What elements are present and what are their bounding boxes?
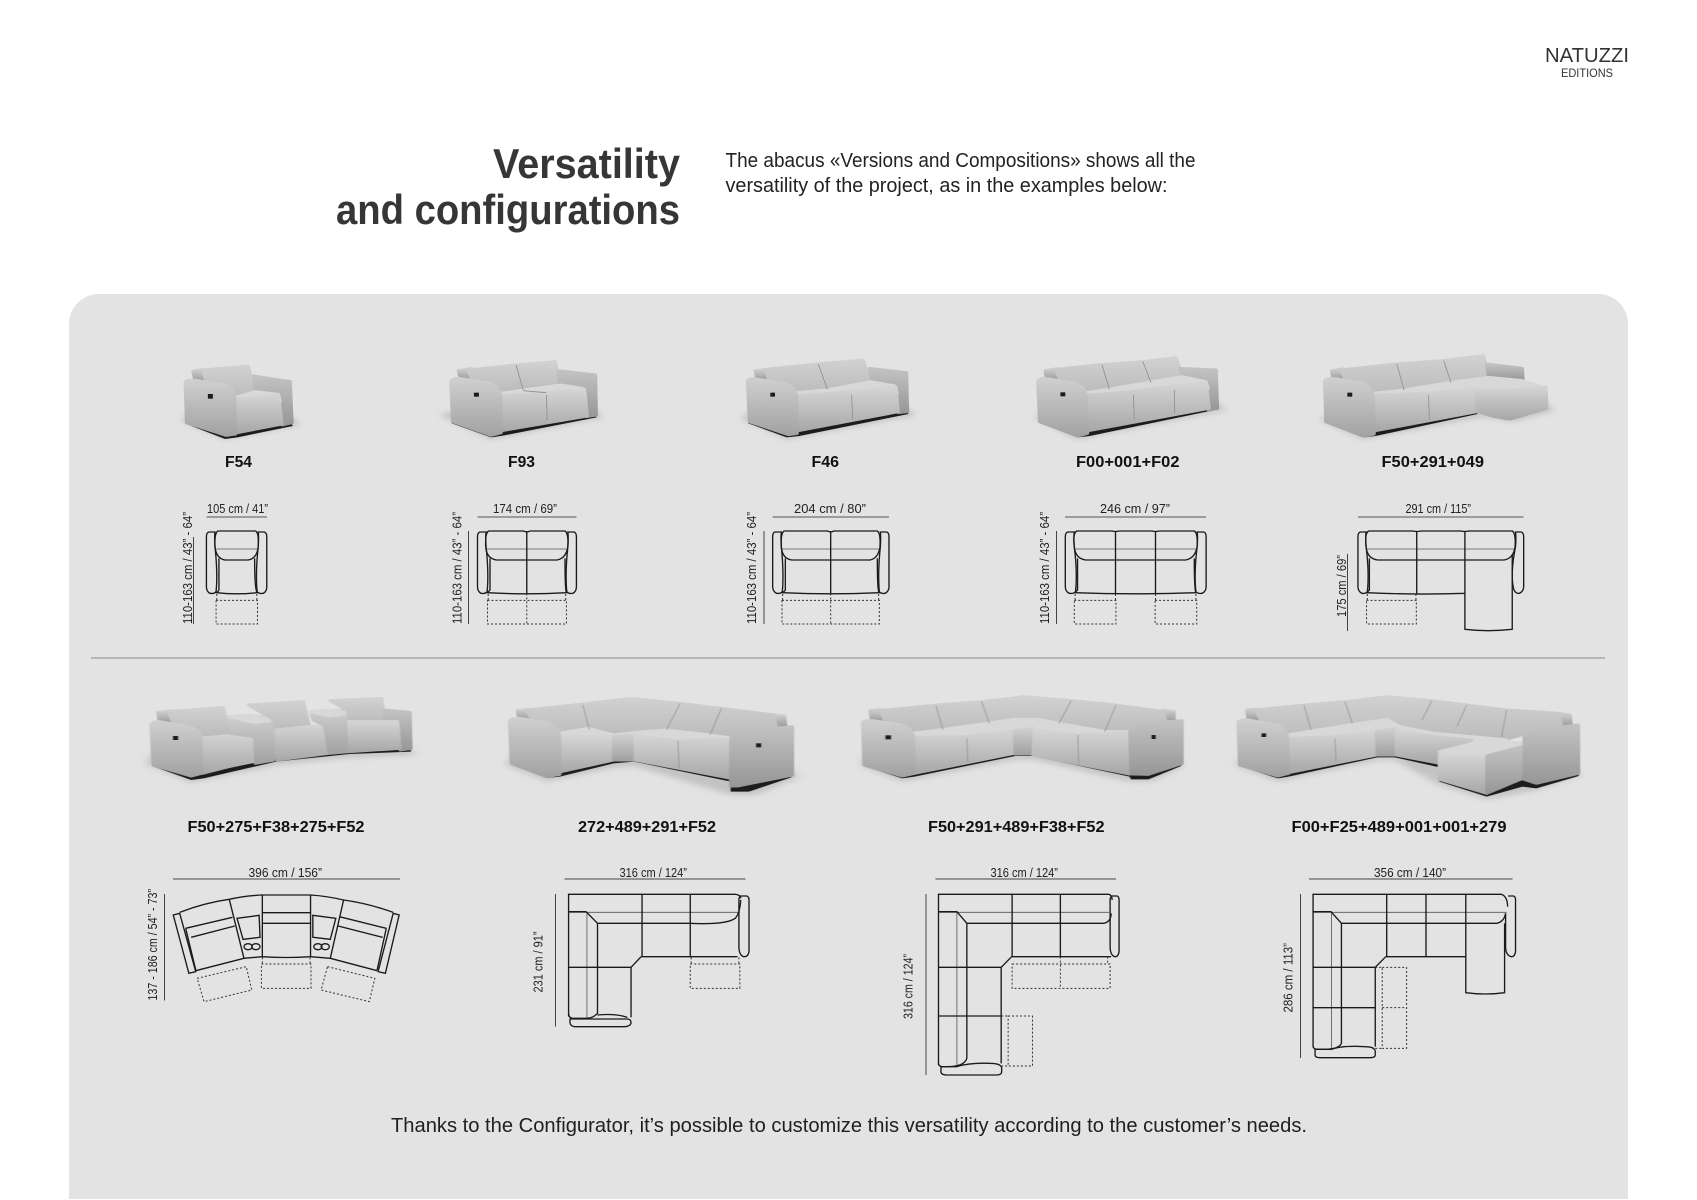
label: F50+275+F38+275+F52: F50+275+F38+275+F52 xyxy=(188,819,365,836)
floor plan: F50+275+F38+275+F52 xyxy=(173,895,399,1002)
logo: Natuzzi Editions: EDITIONS xyxy=(1561,68,1613,80)
sofa photo: F54 xyxy=(180,366,300,439)
width dimension: F54: 105 cm / 41” xyxy=(207,501,268,516)
label: F93: F93 xyxy=(508,454,535,471)
floor plan: F50+291+049 xyxy=(1358,531,1524,631)
module: 272+489+291+F52 xyxy=(506,698,800,1027)
width dimension: 272+489+291+F52: 316 cm / 124” xyxy=(620,865,687,880)
depth dimension: F00+001+F02 xyxy=(1037,512,1057,624)
depth dimension: 272+489+291+F52 xyxy=(530,894,556,1026)
module: F93 xyxy=(439,362,604,624)
floor plan: F93 xyxy=(477,531,576,624)
width dimension: F46 xyxy=(773,501,889,518)
depth dimension: F46 xyxy=(744,512,764,624)
depth dimension: 272+489+291+F52: 231 cm / 91” xyxy=(530,932,546,992)
intro text xyxy=(726,150,1196,197)
module: F54 xyxy=(180,366,300,624)
depth dimension: F00+001+F02: 110-163 cm / 43” - 64” xyxy=(1037,512,1052,624)
floor plan: F50+291+489+F38+F52 xyxy=(938,894,1119,1075)
module: F50+275+F38+275+F52 xyxy=(145,698,416,1002)
module: F00+F25+489+001+001+279 xyxy=(1235,697,1581,1058)
sofa photo: F46 xyxy=(740,360,917,439)
module: F50+291+049 xyxy=(1320,356,1555,631)
sofa photo: F00+F25+489+001+001+279 xyxy=(1235,697,1581,799)
depth dimension: F93: 110-163 cm / 43” - 64” xyxy=(450,512,464,624)
intro text: The abacus «Versions and Compositions» shows all the xyxy=(726,150,1196,172)
floor plan: F00+F25+489+001+001+279 xyxy=(1313,894,1516,1058)
label: F46: F46 xyxy=(812,454,839,471)
sofa photo: F50+275+F38+275+F52 xyxy=(145,698,416,783)
title: and configurations xyxy=(336,186,680,233)
depth dimension: F93 xyxy=(450,512,469,624)
closing text: Thanks to the Configurator, it’s possible to customize this versatility according to the customer’s needs. xyxy=(391,1114,1307,1137)
width dimension: F50+275+F38+275+F52: 396 cm / 156” xyxy=(248,865,322,880)
sofa photo: F50+291+049 xyxy=(1320,356,1555,439)
label: F50+291+049: F50+291+049 xyxy=(1382,454,1484,471)
width dimension: F93: 174 cm / 69” xyxy=(493,501,557,516)
sofa photo: 272+489+291+F52 xyxy=(506,698,800,795)
width dimension: F50+291+489+F38+F52: 316 cm / 124” xyxy=(990,865,1058,880)
logo: Natuzzi Editions xyxy=(1545,45,1629,80)
sofa photo: F93 xyxy=(439,362,604,439)
floor plan: F00+001+F02 xyxy=(1065,531,1206,624)
sofa photo: F00+001+F02 xyxy=(1035,358,1227,439)
label: F00+F25+489+001+001+279: F00+F25+489+001+001+279 xyxy=(1292,819,1507,836)
depth dimension: F54: 110-163 cm / 43” - 64” xyxy=(180,512,195,624)
title: Versatility xyxy=(493,140,681,187)
depth dimension: F50+275+F38+275+F52 xyxy=(145,889,165,1000)
width dimension: F00+001+F02: 246 cm / 97” xyxy=(1100,501,1170,516)
depth dimension: F50+275+F38+275+F52: 137 - 186 cm / 54” - 73” xyxy=(145,889,160,1000)
width dimension: F46: 204 cm / 80” xyxy=(794,501,866,516)
panel: configurations background xyxy=(69,294,1628,1199)
label: F50+291+489+F38+F52: F50+291+489+F38+F52 xyxy=(928,819,1105,836)
depth dimension: F50+291+049: 175 cm / 69” xyxy=(1334,555,1349,617)
floor plan: 272+489+291+F52 xyxy=(569,894,749,1027)
module: F00+001+F02 xyxy=(1035,358,1227,624)
width dimension: F00+F25+489+001+001+279: 356 cm / 140” xyxy=(1374,865,1446,880)
label: 272+489+291+F52: 272+489+291+F52 xyxy=(578,819,716,836)
label: F54: F54 xyxy=(225,454,252,471)
depth dimension: F46: 110-163 cm / 43” - 64” xyxy=(744,512,759,624)
title xyxy=(336,140,681,233)
module: F50+291+489+F38+F52 xyxy=(860,697,1183,1075)
width dimension: F93 xyxy=(478,501,576,518)
module: F46 xyxy=(740,360,917,624)
width dimension: F50+291+049: 291 cm / 115” xyxy=(1406,501,1471,516)
floor plan: F46 xyxy=(773,531,889,624)
label: F00+001+F02: F00+001+F02 xyxy=(1076,454,1180,471)
logo: Natuzzi Editions: NATUZZI xyxy=(1545,45,1629,67)
depth dimension: F00+F25+489+001+001+279: 286 cm / 113” xyxy=(1280,943,1296,1012)
depth dimension: F50+291+489+F38+F52: 316 cm / 124” xyxy=(900,954,916,1019)
intro text: versatility of the project, as in the examples below: xyxy=(726,175,1168,197)
floor plan: F54 xyxy=(206,531,267,624)
sofa photo: F50+291+489+F38+F52 xyxy=(860,697,1183,782)
